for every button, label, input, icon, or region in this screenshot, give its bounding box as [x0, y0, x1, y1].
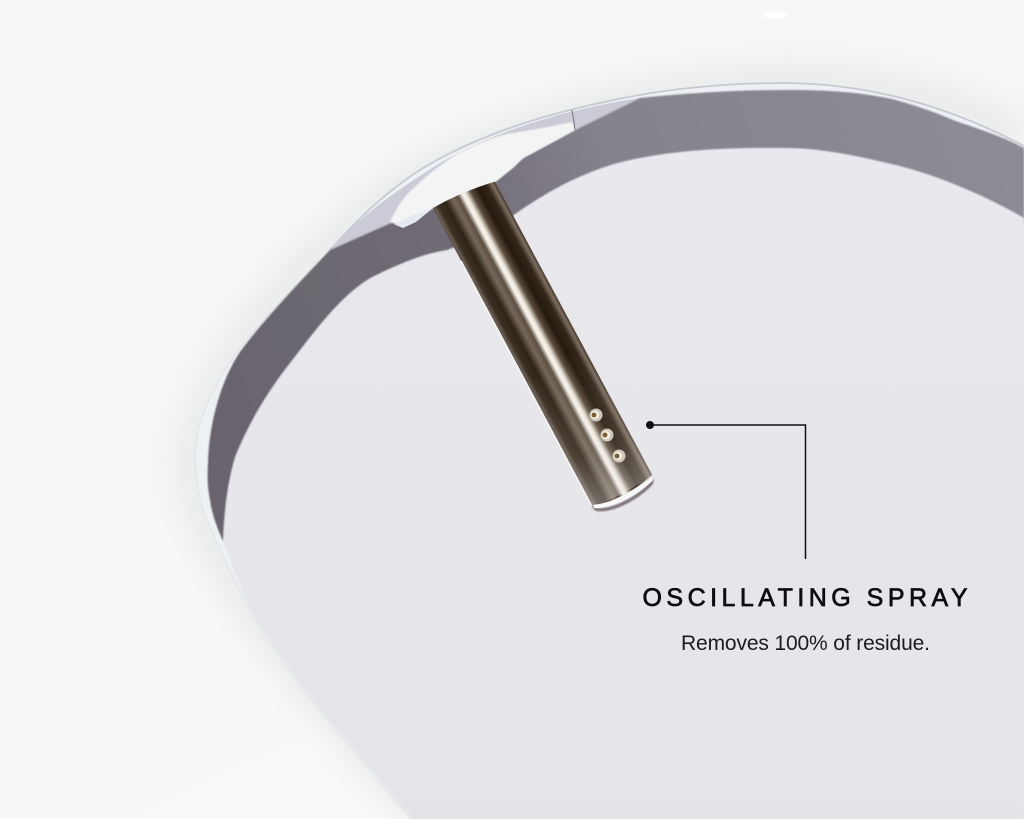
bowl floor	[223, 148, 1024, 819]
callout leader line	[646, 421, 806, 559]
rim shadow wedge	[330, 98, 640, 250]
nozzle housing	[390, 110, 575, 228]
bowl rim	[195, 83, 1024, 819]
spray jets	[590, 408, 626, 462]
rim top edge	[330, 83, 1024, 250]
cast shadow in bowl	[208, 90, 1024, 541]
callout heading: OSCILLATING SPRAY	[642, 584, 968, 612]
wand tip	[591, 477, 654, 511]
spray wand	[432, 172, 661, 511]
callout description: Removes 100% of residue.	[681, 632, 930, 655]
